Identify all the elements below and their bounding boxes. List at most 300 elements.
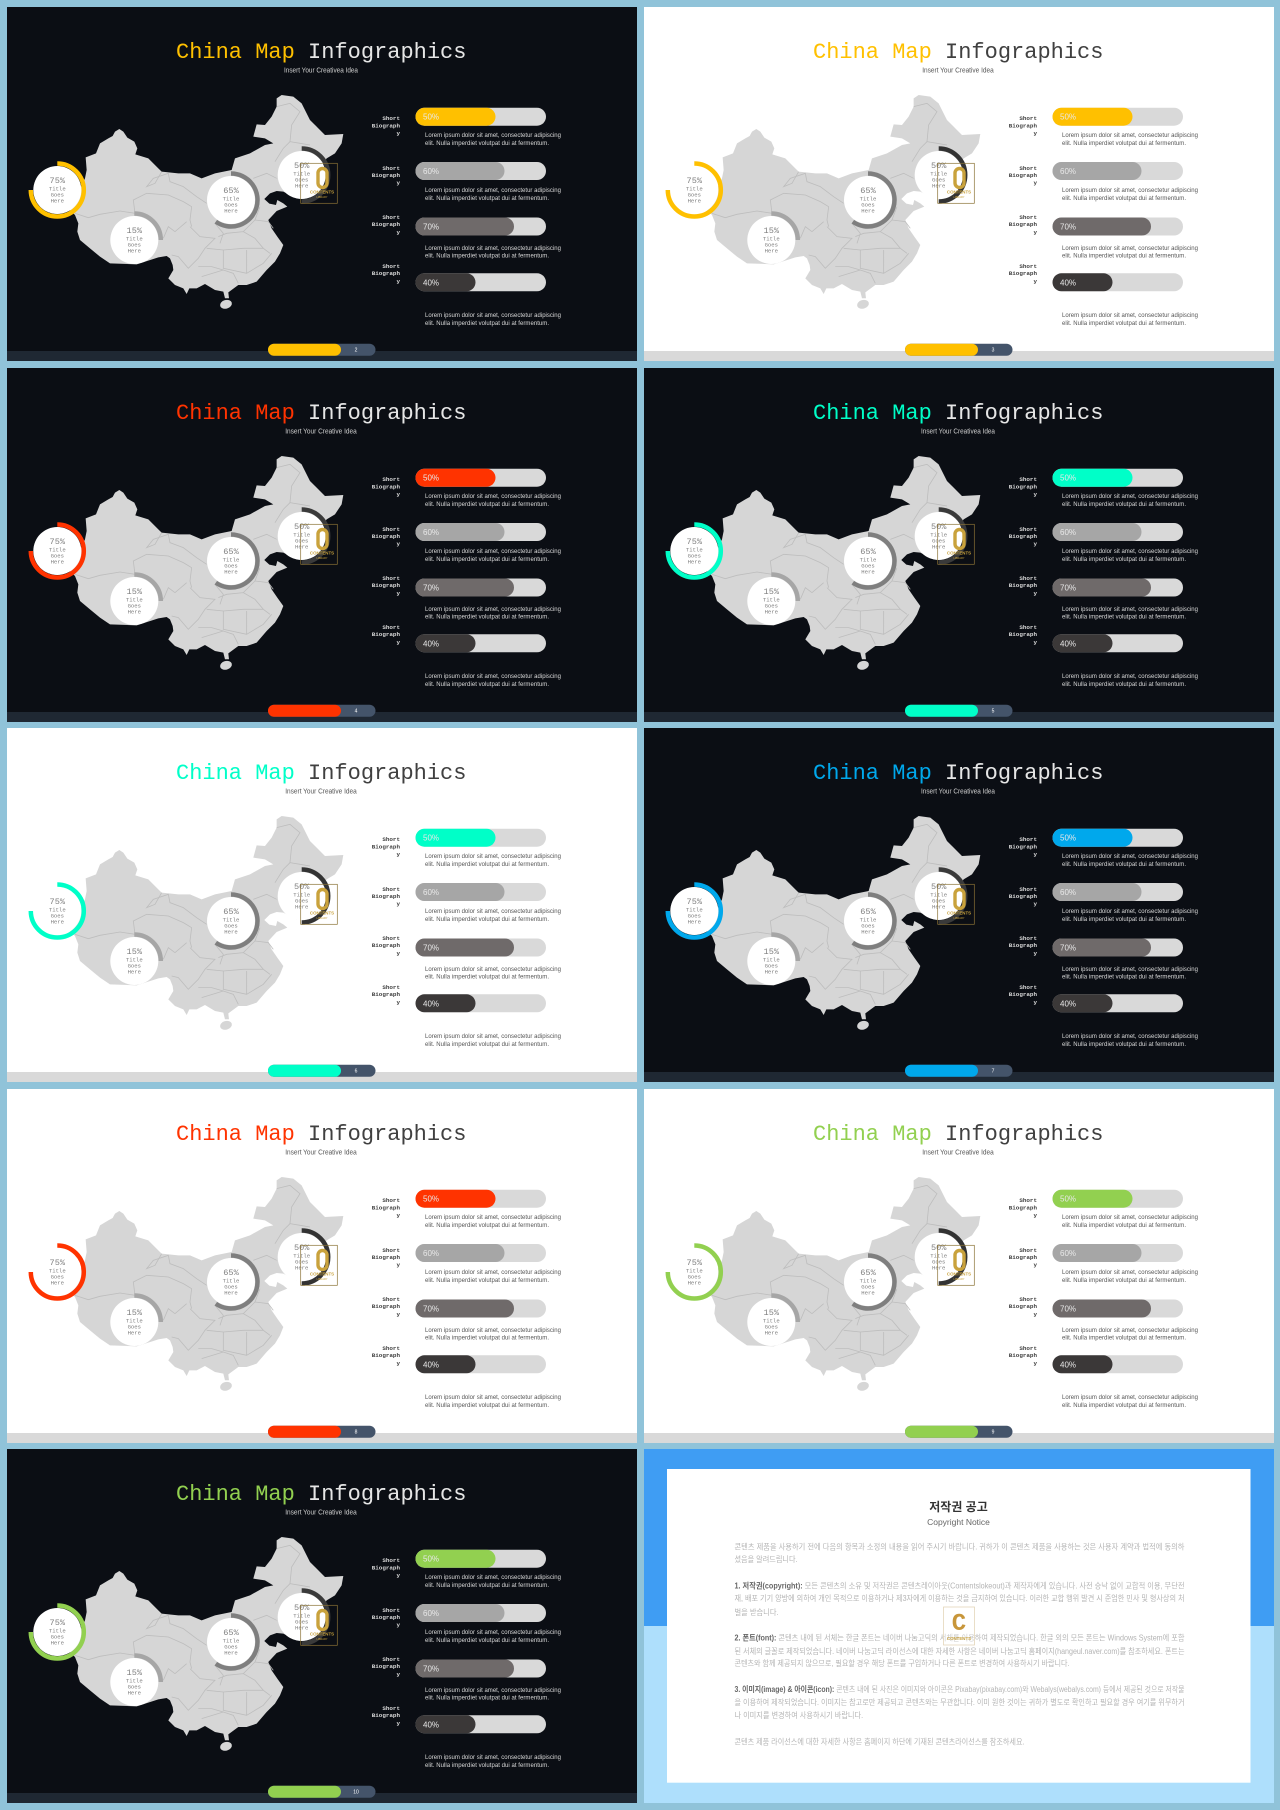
callout 50%: Goes xyxy=(295,1258,308,1265)
callout 15%: Goes xyxy=(764,1323,778,1330)
callout 15%: Title xyxy=(126,956,143,963)
progress bar 70%: 70% xyxy=(1060,222,1076,232)
biography label 3 xyxy=(1008,574,1037,596)
progress bar 40%: 40% xyxy=(423,278,439,287)
watermark logo xyxy=(937,1245,974,1285)
callout 75%: Title xyxy=(49,1267,66,1274)
biography label 3 xyxy=(1008,214,1037,236)
progress bar 40% xyxy=(416,994,546,1012)
biography label 1 xyxy=(372,115,400,137)
callout 50%: Here xyxy=(295,543,308,550)
biography label 3: Biograph xyxy=(1008,582,1037,588)
slide 7: dark blue xyxy=(644,728,1274,1082)
description 1 xyxy=(1062,854,1198,868)
callout 15%: Title xyxy=(762,596,779,603)
biography label 3: Short xyxy=(1019,935,1036,942)
biography label 4: Short xyxy=(1019,1344,1036,1352)
biography label 3: y xyxy=(396,1310,400,1318)
biography label 3: Short xyxy=(382,214,400,221)
biography label 3: Biograph xyxy=(372,221,400,228)
callout 15% xyxy=(110,1295,161,1346)
callout 15%: 15% xyxy=(127,1308,143,1318)
biography label 3: Short xyxy=(382,574,400,582)
description 4: Lorem ipsum dolor sit amet, consectetur adipiscing xyxy=(1062,674,1198,680)
progress bar 40% xyxy=(1052,1355,1182,1373)
description 1: Lorem ipsum dolor sit amet, consectetur adipiscing xyxy=(425,854,561,860)
callout 75%: Goes xyxy=(687,191,701,198)
callout 75%: Goes xyxy=(51,1633,64,1640)
callout 15%: Goes xyxy=(128,602,141,609)
description 4: elit. Nulla imperdiet volutpat dui at fermentum. xyxy=(425,1042,549,1048)
progress bar 60%: 60% xyxy=(423,167,439,176)
biography label 3: Biograph xyxy=(1008,942,1037,949)
biography label 4: Short xyxy=(382,984,400,991)
biography label 1: Biograph xyxy=(1008,1204,1037,1211)
progress bar 50%: 50% xyxy=(423,1194,439,1203)
slide 2: dark yellow xyxy=(7,7,637,361)
callout 50%: Goes xyxy=(931,1258,945,1265)
biography label 3 xyxy=(372,935,400,957)
callout 75%: Title xyxy=(685,185,702,192)
biography label 1: y xyxy=(396,490,400,498)
callout 75%: Goes xyxy=(687,552,701,559)
progress bar 70% xyxy=(416,218,546,236)
copyright paragraph: 벌을 받습니다. xyxy=(734,1607,778,1617)
biography label 2: Short xyxy=(1019,165,1036,172)
callout 50%: Title xyxy=(930,531,947,538)
watermark logo: LIBRARY xyxy=(953,1276,964,1280)
slide 10: dark green xyxy=(7,1449,637,1803)
callout 50%: Title xyxy=(293,1612,310,1619)
biography label 1: y xyxy=(1033,851,1037,858)
description 4: elit. Nulla imperdiet volutpat dui at fermentum. xyxy=(1062,1402,1186,1408)
callout 65%: Title xyxy=(223,195,239,202)
callout 65% xyxy=(207,894,258,948)
watermark logo: CONTENTS xyxy=(310,1271,334,1276)
china map xyxy=(70,95,343,310)
biography label 2: Short xyxy=(1019,886,1036,893)
description 4: elit. Nulla imperdiet volutpat dui at fermentum. xyxy=(1062,321,1186,327)
biography label 2: Biograph xyxy=(1008,893,1037,900)
biography label 3: Short xyxy=(1019,1296,1036,1302)
callout 15%: 15% xyxy=(763,586,779,596)
biography label 4: Short xyxy=(1019,263,1036,270)
progress bar 60%: 60% xyxy=(423,888,439,897)
page pill: 3 xyxy=(991,348,994,354)
watermark logo: CONTENTS xyxy=(946,1636,971,1641)
biography label 1 xyxy=(372,836,400,858)
callout 15% xyxy=(110,214,161,264)
callout 50%: Goes xyxy=(295,176,308,183)
image and icon paragraph: 을 이용하여 제작되었습니다. 이미지는 참고로만 제공되고 콘텐츠와는 무관합니다. 이미 원한 것이는 귀하가 별도로 확인하고 필요할 경우 여기를 위무하거 xyxy=(734,1697,1184,1707)
progress bar 50% xyxy=(1052,108,1182,126)
description 1 xyxy=(1062,1214,1198,1228)
biography label 1: Short xyxy=(382,836,400,843)
title: China Map Infographics xyxy=(176,40,466,65)
progress bar 60% xyxy=(416,1244,546,1262)
title: China Map Infographics xyxy=(812,400,1103,426)
callout 75% xyxy=(31,884,84,938)
font paragraph: 된 서체의 글꼴로 제작되었습니다. 네이버 나눔고딕 라이선스에 대한 자세한 사항은 네이버 나눔고딕 홈페이지(hangeul.naver.com)를 참조하세요. 폰트는 xyxy=(734,1646,1184,1656)
slide 11: copyright notice xyxy=(644,1449,1274,1803)
description 1: elit. Nulla imperdiet volutpat dui at fermentum. xyxy=(1062,1222,1186,1228)
callout 50% xyxy=(914,1230,965,1283)
china map xyxy=(706,95,980,310)
callout 50% xyxy=(278,870,328,922)
callout 65% xyxy=(844,1255,894,1308)
description 1: Lorem ipsum dolor sit amet, consectetur adipiscing xyxy=(425,494,561,500)
callout 75% xyxy=(667,884,720,938)
watermark logo: CONTENTS xyxy=(310,550,334,555)
description 4: elit. Nulla imperdiet volutpat dui at fermentum. xyxy=(425,1763,549,1769)
callout 50%: 50% xyxy=(930,161,947,171)
description 1: elit. Nulla imperdiet volutpat dui at fermentum. xyxy=(425,862,549,868)
callout 50%: 50% xyxy=(294,161,310,171)
description 3: Lorem ipsum dolor sit amet, consectetur adipiscing xyxy=(425,1328,561,1334)
description 4: Lorem ipsum dolor sit amet, consectetur adipiscing xyxy=(1062,313,1198,319)
description 2: Lorem ipsum dolor sit amet, consectetur adipiscing xyxy=(425,548,561,554)
callout 75%: Goes xyxy=(51,552,64,559)
biography label 1 xyxy=(372,1557,400,1579)
page pill xyxy=(904,1065,1012,1077)
biography label 3: Short xyxy=(1019,214,1036,221)
biography label 2 xyxy=(372,1607,400,1628)
progress bar 60%: 60% xyxy=(1060,167,1076,176)
progress bar 40%: 40% xyxy=(1060,278,1076,287)
description 3: Lorem ipsum dolor sit amet, consectetur adipiscing xyxy=(425,246,561,252)
progress bar 40% xyxy=(416,273,546,291)
description 1: Lorem ipsum dolor sit amet, consectetur adipiscing xyxy=(1062,133,1198,139)
biography label 3: Short xyxy=(382,935,400,942)
page pill xyxy=(268,344,376,356)
progress bar 60% xyxy=(1052,1244,1182,1262)
biography label 2: y xyxy=(1033,900,1037,908)
callout 65% xyxy=(844,894,894,948)
progress bar 60% xyxy=(416,522,546,540)
description 4: elit. Nulla imperdiet volutpat dui at fermentum. xyxy=(1062,682,1186,688)
watermark logo xyxy=(301,1605,337,1645)
callout 75%: 75% xyxy=(50,1258,66,1268)
progress bar 50%: 50% xyxy=(423,473,439,482)
progress bar 50% xyxy=(1052,468,1182,486)
callout 50%: Goes xyxy=(295,537,308,544)
biography label 4: Short xyxy=(382,263,400,270)
description 2 xyxy=(425,909,561,923)
progress bar 50%: 50% xyxy=(423,1555,439,1564)
biography label 2 xyxy=(1008,526,1037,547)
biography label 3: y xyxy=(396,1671,400,1678)
description 4 xyxy=(1062,674,1198,688)
progress bar 70%: 70% xyxy=(423,583,439,592)
description 1: Lorem ipsum dolor sit amet, consectetur adipiscing xyxy=(1062,854,1198,860)
description 1 xyxy=(425,854,561,868)
description 3: elit. Nulla imperdiet volutpat dui at fermentum. xyxy=(1062,1335,1186,1341)
callout 75% xyxy=(31,524,84,577)
description 2 xyxy=(425,548,561,562)
callout 65%: Here xyxy=(861,929,874,936)
callout 65%: 65% xyxy=(223,546,240,556)
progress bar 60%: 60% xyxy=(1060,1248,1076,1258)
callout 15% xyxy=(747,214,797,264)
callout 65%: Here xyxy=(224,208,238,215)
description 4 xyxy=(425,1755,561,1769)
progress bar 60% xyxy=(416,162,546,180)
progress bar 50% xyxy=(416,468,546,486)
watermark logo: LIBRARY xyxy=(953,916,964,920)
biography label 2: y xyxy=(396,180,400,186)
watermark logo: LIBRARY xyxy=(316,1276,328,1280)
callout 75%: 75% xyxy=(686,1258,702,1268)
progress bar 50% xyxy=(416,1550,546,1568)
biography label 2: Short xyxy=(1019,1246,1036,1254)
progress bar 50% xyxy=(1052,829,1182,847)
description 2 xyxy=(425,188,561,202)
biography label 3 xyxy=(372,214,400,236)
biography label 2 xyxy=(1008,886,1037,908)
biography label 4: y xyxy=(1033,638,1037,646)
progress bar 50% xyxy=(416,108,546,126)
callout 65%: 65% xyxy=(223,1628,240,1638)
callout 75%: Goes xyxy=(51,912,64,919)
callout 75% xyxy=(667,164,720,216)
callout 65%: 65% xyxy=(860,907,876,917)
progress bar 50% xyxy=(416,829,546,847)
callout 65% xyxy=(844,173,894,227)
description 4 xyxy=(1062,1034,1198,1048)
progress bar 70% xyxy=(1052,218,1182,236)
biography label 4: Short xyxy=(382,624,400,630)
watermark logo: LIBRARY xyxy=(316,195,328,199)
biography label 1: Short xyxy=(382,1196,400,1204)
biography label 1: y xyxy=(1033,1212,1037,1218)
description 1: Lorem ipsum dolor sit amet, consectetur adipiscing xyxy=(425,133,561,139)
subtitle: Insert Your Creative Idea xyxy=(285,1149,357,1156)
progress bar 50%: 50% xyxy=(1060,1194,1076,1203)
biography label 3: y xyxy=(1033,590,1037,596)
progress bar 70% xyxy=(416,938,546,956)
description 4: elit. Nulla imperdiet volutpat dui at fermentum. xyxy=(425,1402,549,1408)
biography label 3: y xyxy=(1033,229,1037,236)
description 4 xyxy=(425,674,561,688)
description 2: Lorem ipsum dolor sit amet, consectetur adipiscing xyxy=(425,1270,561,1276)
description 1 xyxy=(425,133,561,147)
description 2: Lorem ipsum dolor sit amet, consectetur adipiscing xyxy=(425,1630,561,1636)
title: China Map Infographics xyxy=(812,40,1103,65)
progress bar 50%: 50% xyxy=(1060,473,1076,482)
progress bar 70%: 70% xyxy=(423,944,439,952)
description 2: Lorem ipsum dolor sit amet, consectetur adipiscing xyxy=(1062,188,1198,194)
subtitle: Insert Your Creative Idea xyxy=(922,68,993,74)
description 3 xyxy=(425,606,561,620)
description 4: Lorem ipsum dolor sit amet, consectetur adipiscing xyxy=(425,674,561,680)
callout 50%: Here xyxy=(295,904,308,911)
font paragraph: 콘텐츠와 함께 제공되지 않으므로, 필요할 경우 해당 폰트를 구입하거나 다른 폰트로 변경하여 사용하시기 바랍니다. xyxy=(734,1658,1069,1668)
callout 15%: 15% xyxy=(127,586,143,596)
biography label 4: y xyxy=(396,1360,400,1366)
description 2: elit. Nulla imperdiet volutpat dui at fermentum. xyxy=(425,196,549,202)
progress bar 40%: 40% xyxy=(1060,639,1076,648)
callout 75%: Title xyxy=(49,1627,66,1634)
callout 65%: 65% xyxy=(223,186,240,196)
biography label 1: Biograph xyxy=(1008,122,1037,130)
biography label 3: Short xyxy=(1019,574,1036,582)
description 4 xyxy=(425,1034,561,1048)
description 1 xyxy=(425,1214,561,1228)
slide 3: light yellow xyxy=(644,7,1274,361)
callout 50%: Title xyxy=(930,170,947,177)
page pill: 8 xyxy=(355,1429,358,1435)
biography label 3 xyxy=(1008,935,1037,957)
callout 50%: Goes xyxy=(931,897,945,904)
image and icon paragraph xyxy=(734,1684,1184,1720)
biography label 3 xyxy=(372,1656,400,1678)
callout 75%: Here xyxy=(51,1640,64,1647)
title: China Map Infographics xyxy=(176,1122,466,1146)
biography label 1: Biograph xyxy=(372,122,400,130)
description 1: Lorem ipsum dolor sit amet, consectetur adipiscing xyxy=(425,1575,561,1581)
description 4: elit. Nulla imperdiet volutpat dui at fermentum. xyxy=(425,321,549,327)
callout 75%: Here xyxy=(51,558,64,565)
biography label 1: Short xyxy=(1019,476,1036,482)
description 3: Lorem ipsum dolor sit amet, consectetur adipiscing xyxy=(425,967,561,973)
biography label 2: Biograph xyxy=(372,893,400,900)
biography label 2: Short xyxy=(382,165,400,172)
progress bar 50%: 50% xyxy=(423,113,439,122)
callout 75%: Here xyxy=(687,919,701,926)
description 2 xyxy=(425,1270,561,1284)
biography label 2: Short xyxy=(382,1607,400,1614)
copyright paragraph xyxy=(734,1580,1184,1617)
callout 65%: Title xyxy=(223,556,239,563)
description 2: elit. Nulla imperdiet volutpat dui at fermentum. xyxy=(1062,556,1186,562)
page pill: 5 xyxy=(991,708,994,714)
closing line: 콘텐츠 제품 라이선스에 대한 자세한 사항은 홈페이지 하단에 기재된 콘텐츠라이선스를 참조하세요. xyxy=(734,1736,1024,1746)
progress bar 50%: 50% xyxy=(423,834,439,843)
progress bar 40%: 40% xyxy=(423,999,439,1008)
progress bar 60%: 60% xyxy=(423,1609,439,1618)
watermark logo: CONTENTS xyxy=(946,550,971,555)
callout 15% xyxy=(747,574,797,624)
callout 50%: Title xyxy=(930,891,947,898)
callout 65%: Here xyxy=(224,1289,238,1296)
watermark logo: LIBRARY xyxy=(953,195,964,199)
biography label 4: Short xyxy=(382,1705,400,1712)
callout 75% xyxy=(667,1245,720,1298)
description 1: elit. Nulla imperdiet volutpat dui at fermentum. xyxy=(1062,862,1186,868)
description 3: elit. Nulla imperdiet volutpat dui at fermentum. xyxy=(1062,614,1186,620)
callout 65%: Title xyxy=(859,556,876,563)
subtitle: Insert Your Creative Idea xyxy=(285,788,357,796)
callout 50%: Title xyxy=(293,531,310,538)
biography label 2: y xyxy=(1033,540,1037,547)
callout 65%: Here xyxy=(861,568,874,575)
biography label 4: Biograph xyxy=(372,991,400,998)
biography label 3: y xyxy=(396,950,400,957)
progress bar 70%: 70% xyxy=(1060,1304,1076,1313)
callout 50%: 50% xyxy=(294,1242,310,1252)
description 3: elit. Nulla imperdiet volutpat dui at fermentum. xyxy=(425,1335,549,1341)
callout 75% xyxy=(667,524,720,577)
biography label 1: y xyxy=(396,130,400,137)
progress bar 40%: 40% xyxy=(423,1360,439,1369)
biography label 4: y xyxy=(396,638,400,646)
callout 15%: Goes xyxy=(128,1683,141,1690)
progress bar 40% xyxy=(1052,273,1182,291)
biography label 2: Short xyxy=(382,886,400,893)
callout 50%: Goes xyxy=(931,176,945,183)
callout 15%: Goes xyxy=(128,1323,141,1330)
title: China Map Infographics xyxy=(812,761,1103,786)
china map xyxy=(706,455,980,671)
description 1 xyxy=(425,1575,561,1589)
description 4: Lorem ipsum dolor sit amet, consectetur adipiscing xyxy=(1062,1394,1198,1400)
biography label 4: Biograph xyxy=(1008,630,1037,638)
biography label 2: y xyxy=(396,1261,400,1268)
china map xyxy=(706,1176,980,1392)
biography label 3: Short xyxy=(382,1296,400,1302)
biography label 2: Biograph xyxy=(372,172,400,179)
biography label 1 xyxy=(1008,476,1037,498)
progress bar 60% xyxy=(1052,522,1182,540)
callout 65%: Here xyxy=(861,208,874,215)
callout 75%: Title xyxy=(685,1267,702,1274)
description 3: elit. Nulla imperdiet volutpat dui at fermentum. xyxy=(1062,974,1186,980)
biography label 1: Short xyxy=(1019,115,1036,122)
description 3 xyxy=(425,1328,561,1341)
callout 75%: Title xyxy=(49,546,66,553)
subtitle: Insert Your Creative Idea xyxy=(922,1149,993,1156)
progress bar 70% xyxy=(1052,938,1182,956)
callout 65%: 65% xyxy=(223,1268,240,1278)
biography label 2 xyxy=(372,165,400,186)
callout 15%: Here xyxy=(764,248,778,255)
biography label 3: y xyxy=(1033,950,1037,957)
description 2: elit. Nulla imperdiet volutpat dui at fermentum. xyxy=(1062,196,1186,202)
progress bar 60%: 60% xyxy=(423,528,439,536)
callout 75%: 75% xyxy=(50,536,66,546)
biography label 2: Biograph xyxy=(372,532,400,540)
description 2: Lorem ipsum dolor sit amet, consectetur adipiscing xyxy=(1062,1270,1198,1276)
biography label 1: Biograph xyxy=(372,844,400,850)
description 4: Lorem ipsum dolor sit amet, consectetur adipiscing xyxy=(425,1394,561,1400)
progress bar 40% xyxy=(1052,994,1182,1012)
progress bar 70% xyxy=(1052,1299,1182,1317)
biography label 3 xyxy=(372,1296,400,1318)
font paragraph xyxy=(734,1632,1185,1668)
white notice panel xyxy=(666,1469,1250,1783)
biography label 1: Biograph xyxy=(1008,483,1037,490)
callout 65%: Goes xyxy=(224,562,238,569)
description 3 xyxy=(1062,606,1198,620)
description 4 xyxy=(1062,1394,1198,1408)
watermark logo xyxy=(301,163,337,203)
callout 75%: Goes xyxy=(51,1273,64,1280)
watermark logo xyxy=(301,1245,337,1285)
china map xyxy=(70,1176,343,1392)
biography label 4: Biograph xyxy=(1008,991,1037,998)
biography label 2: Biograph xyxy=(1008,172,1037,179)
callout 75%: Goes xyxy=(687,912,701,919)
copyright paragraph: 1. 저작권(copyright): 모든 콘텐츠의 소유 및 저작권은 콘텐츠레이아웃(Contentslokeout)과 제작자에게 있습니다. 사전 승낙 없이 교합적 이용, 무단전 xyxy=(734,1580,1184,1590)
description 2: elit. Nulla imperdiet volutpat dui at fermentum. xyxy=(425,556,549,562)
subtitle: Insert Your Creativea Idea xyxy=(920,788,995,796)
callout 65% xyxy=(207,1616,258,1668)
description 3 xyxy=(425,1688,561,1702)
biography label 2: y xyxy=(396,900,400,908)
callout 50%: Here xyxy=(295,1625,308,1632)
title: China Map Infographics xyxy=(176,1482,466,1507)
biography label 4: Short xyxy=(1019,984,1036,991)
